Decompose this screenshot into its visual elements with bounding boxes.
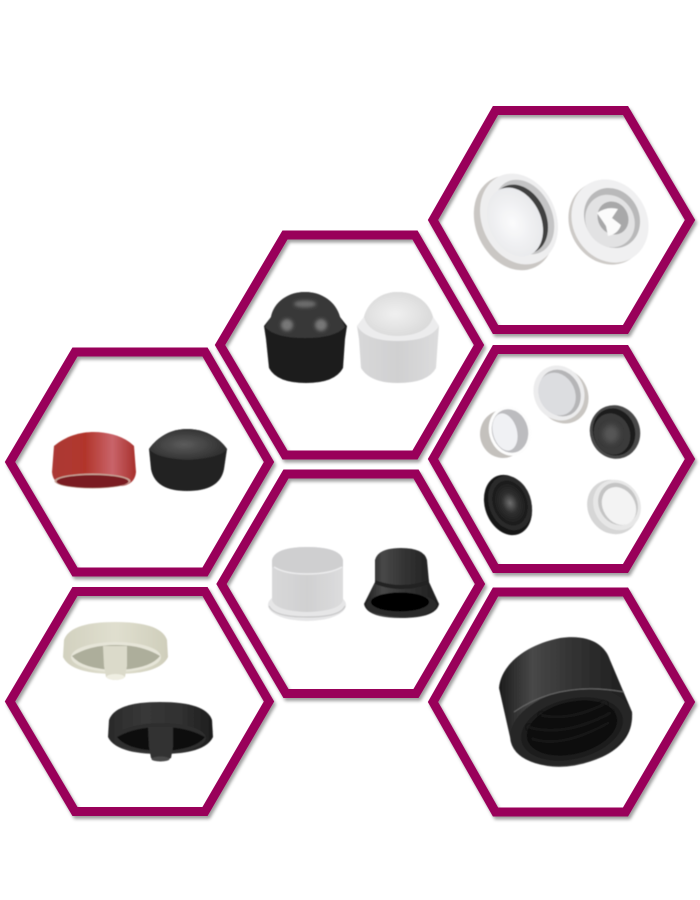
icon: black round cap: [149, 429, 227, 491]
panel: dome nut caps: [220, 235, 479, 455]
icon: cream stem cap: [63, 622, 168, 680]
panel: small round hole plugs: [433, 350, 690, 568]
panel: low profile round caps: [10, 352, 269, 572]
panel: threaded cap: [433, 592, 690, 812]
icon: white flanged cap: [268, 547, 346, 621]
panel: cap with central stem: [10, 592, 269, 812]
icon: white cap left: [480, 401, 537, 461]
icon: black threaded nut cap: [499, 637, 640, 778]
icon: red round cap: [52, 432, 136, 488]
icon: white cap with keyed hole: [553, 165, 664, 279]
icon: black stem cap: [108, 702, 213, 762]
panel: flanged and flared caps: [222, 474, 480, 694]
icon: black flared cap: [364, 548, 439, 618]
icon: white dome nut cap: [357, 292, 439, 383]
icon: black domed plug: [476, 468, 540, 542]
icon: white cap top: [525, 357, 597, 432]
icon: white cap with dome insert: [459, 161, 572, 283]
icon: white cap lower right: [577, 470, 650, 544]
icon: black dome nut cap: [264, 292, 347, 383]
icon: dark cap right: [582, 398, 648, 466]
panel: white flanged screw covers: [433, 110, 690, 330]
